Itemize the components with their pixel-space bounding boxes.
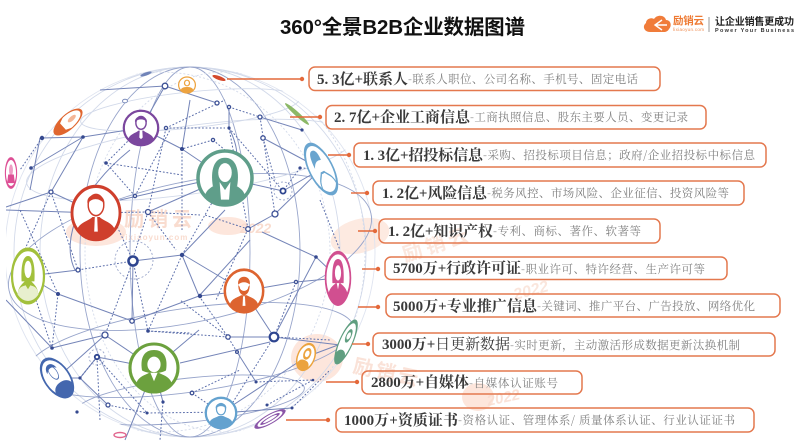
watermarks: 2022 (511, 278, 551, 304)
callout 1 (227, 67, 660, 90)
watermarks: 2022 (484, 386, 522, 410)
avatar: red top sliver (212, 74, 226, 82)
avatar: green woman (130, 344, 178, 393)
callout 8: -实时更新，主动激活形成数据更新汰换机制 (510, 337, 740, 353)
callout 7 (358, 294, 780, 317)
callout 10 (286, 408, 754, 432)
callout 10: -资格认证、管理体系/ 质量体系认证、行业认证证书 (458, 412, 736, 428)
avatar: sky blue man (206, 398, 236, 428)
callout 7: 5000万+专业推广信息 (393, 297, 538, 315)
callout 9: 2800万+自媒体 (371, 373, 469, 391)
avatar: purple thin bottom (254, 407, 286, 431)
callout 8: 3000万+日更新数据 (382, 335, 510, 353)
avatar: magenta woman (326, 253, 350, 306)
icon: cloud (644, 16, 671, 32)
callout 1: -联系人职位、公司名称、手机号、固定电话 (408, 71, 638, 87)
watermarks: lixiaoyun.com (122, 233, 188, 242)
sphere network (0, 67, 386, 440)
callout 6: -职业许可、特许经营、生产许可等 (521, 261, 705, 277)
avatar: lime woman (12, 249, 44, 303)
callout 1: 5. 3亿+联系人 (317, 70, 408, 88)
logo (644, 14, 794, 34)
callout 2: -工商执照信息、股东主要人员、变更记录 (470, 109, 688, 125)
callout 5 (358, 219, 660, 243)
halo rings (89, 182, 292, 365)
callout 7: -关键词、推广平台、广告投放、网络优化 (537, 298, 756, 314)
brand name: 励销云 (673, 14, 704, 27)
brand url: lixiaoyun.com (673, 27, 704, 32)
callout 2 (290, 106, 706, 129)
avatar: teal woman (198, 151, 252, 206)
avatar: orange man (225, 270, 263, 313)
callout 9: -自媒体认证账号 (469, 375, 558, 391)
avatar: small orange ellipse (293, 341, 319, 373)
callout 6 (362, 257, 727, 280)
callout 3 (328, 143, 766, 167)
avatar: light blue woman (298, 140, 344, 198)
watermarks (66, 208, 551, 411)
globe grid (0, 67, 386, 437)
callout 4: -税务风控、市场风险、企业征信、投资风险等 (487, 185, 729, 201)
avatar: orange tilted (51, 105, 85, 139)
avatar: dark blue man (34, 353, 80, 403)
watermarks: 励销云 (399, 223, 475, 267)
callout 8 (352, 333, 775, 356)
callout 3: 1. 3亿+招投标信息 (363, 146, 484, 164)
avatar: teal tilted ellipse (331, 319, 361, 365)
watermarks: 2022 (239, 220, 271, 236)
avatar: pink bottom sliver (114, 432, 126, 438)
avatar: small orange top (179, 77, 195, 93)
callout 4: 1. 2亿+风险信息 (382, 184, 488, 202)
avatar: purple man (124, 111, 158, 146)
slogan: 让企业销售更成功 (715, 15, 794, 28)
solid links (6, 86, 346, 440)
title: 360°全景B2B企业数据图谱 (280, 15, 525, 39)
callout 3: -采购、招投标项目信息；政府/企业招投标中标信息 (483, 147, 756, 163)
callout 9 (326, 371, 582, 394)
avatar: red man (72, 186, 120, 241)
watermarks: 励销云 (124, 208, 196, 231)
callout 5: -专利、商标、著作、软著等 (493, 223, 641, 239)
tagline: Power Your Business (715, 28, 794, 34)
callout 2: 2. 7亿+企业工商信息 (334, 108, 471, 126)
callout 6: 5700万+行政许可证 (393, 259, 521, 277)
avatar: green top-right sliver (284, 102, 310, 126)
callout 5: 1. 2亿+知识产权 (388, 222, 493, 240)
callout 4 (351, 181, 744, 205)
avatar: pink left edge (5, 159, 17, 187)
watermarks: 励销云 (351, 354, 423, 391)
network nodes (29, 70, 318, 415)
dotted links (20, 100, 340, 440)
callout 10: 1000万+资质证书 (344, 411, 459, 429)
